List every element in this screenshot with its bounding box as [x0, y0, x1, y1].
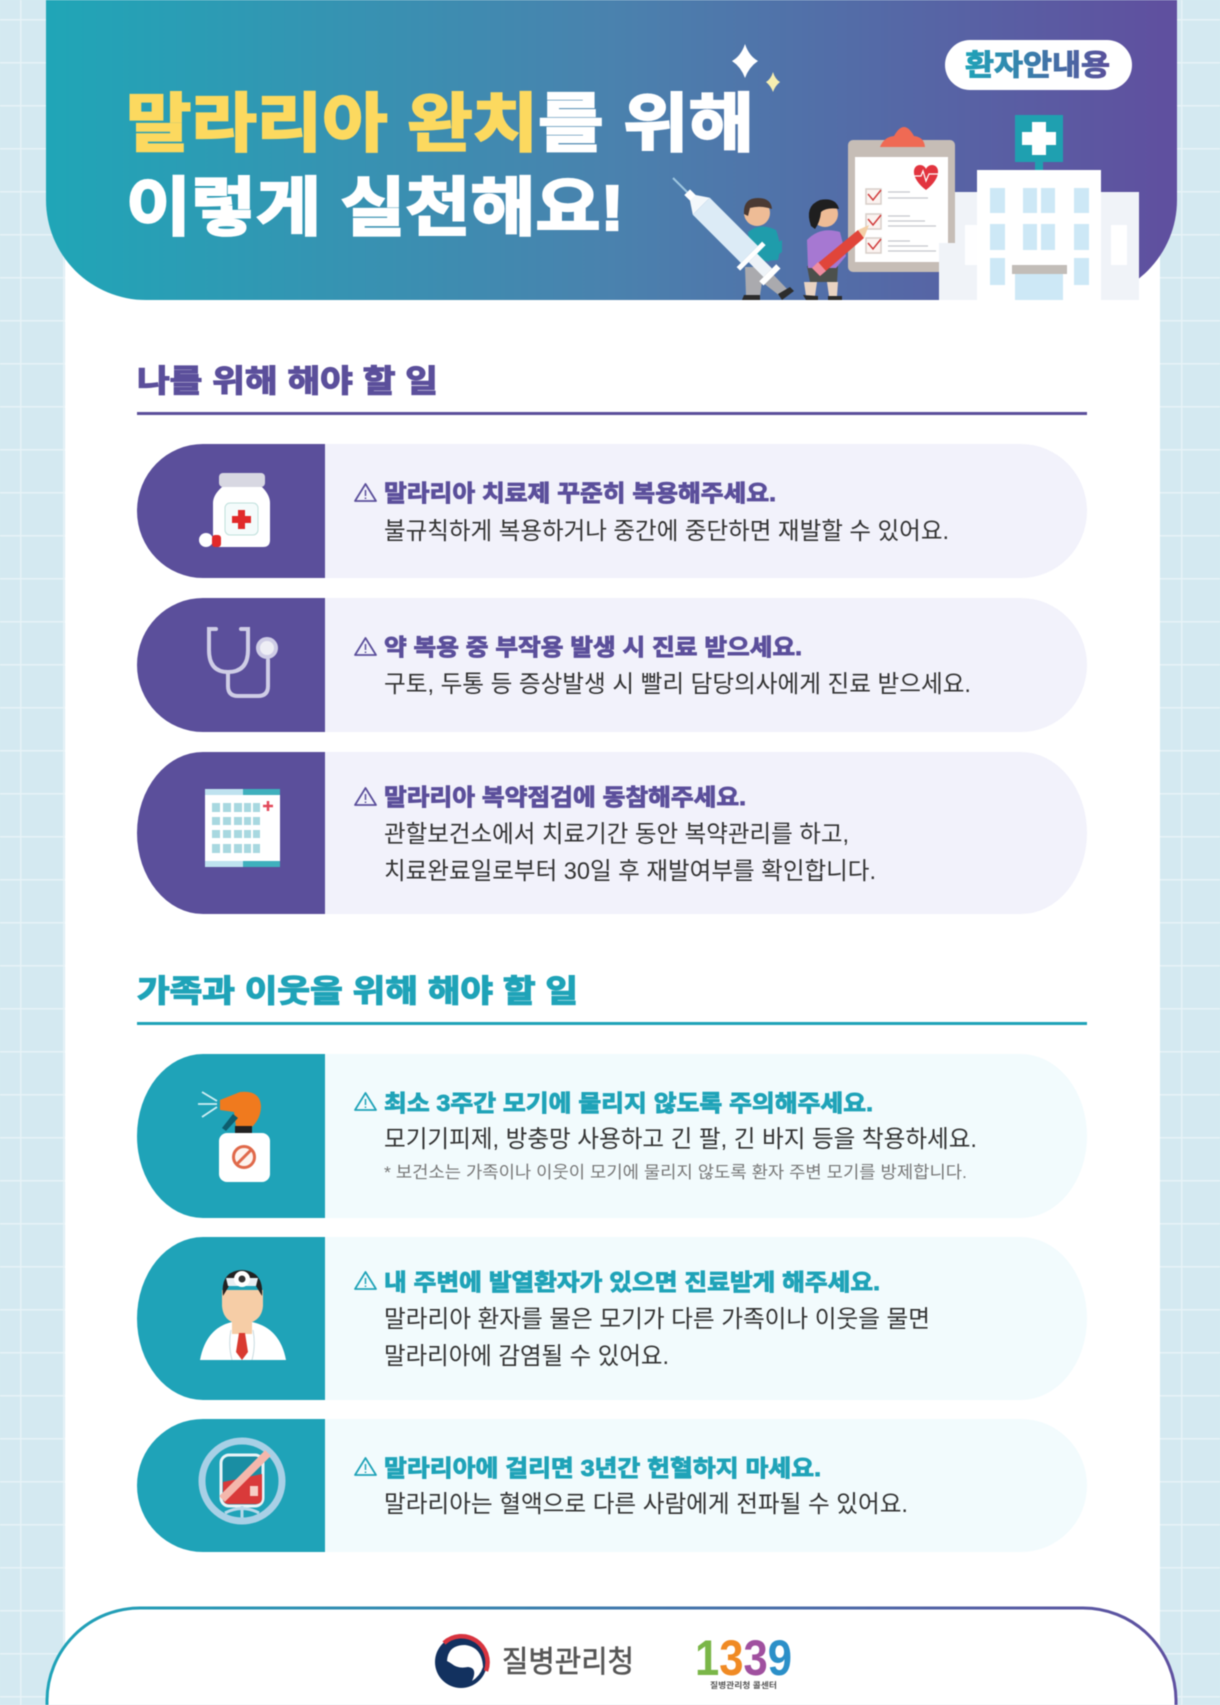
text block: 구토, 두통 등 증상발생 시 빨리 담당의사에게 진료 받으세요. — [384, 671, 971, 698]
text block: 내 주변에 발열환자가 있으면 진료받게 해주세요. — [384, 1269, 880, 1295]
panel: side effects — [137, 598, 1087, 732]
text block: 말라리아 치료제 꾸준히 복용해주세요. — [384, 480, 776, 506]
logo: KDCA emblem — [435, 1636, 488, 1688]
text block — [384, 480, 949, 545]
badge: patient guide — [945, 40, 1132, 90]
icon: pill bottle — [199, 473, 270, 547]
row background — [325, 598, 1087, 732]
illustration: hospital — [939, 115, 1139, 300]
icon panel — [137, 752, 325, 914]
row background — [325, 1237, 1087, 1400]
text block — [384, 1269, 930, 1370]
panel: take medicine — [137, 444, 1087, 578]
text block: 치료완료일로부터 30일 후 재발여부를 확인합니다. — [384, 858, 876, 885]
text block: 말라리아는 혈액으로 다른 사람에게 전파될 수 있어요. — [384, 1491, 908, 1518]
title: 이렇게 실천해요! — [126, 172, 624, 244]
row background — [325, 1054, 1087, 1218]
header gradient background — [46, 0, 1177, 300]
panel: adherence check — [137, 752, 1087, 914]
section heading: for family and neighbors — [137, 974, 1087, 1025]
icon panel — [137, 1419, 325, 1552]
icon: warning — [355, 484, 376, 501]
logo text: 질병관리청 — [502, 1646, 634, 1679]
section heading: for family and neighbors: 가족과 이웃을 위해 해야 할 일 — [137, 974, 578, 1009]
text block — [384, 634, 971, 698]
text block — [384, 784, 876, 885]
icon: warning — [355, 638, 376, 655]
icon: warning — [355, 1458, 376, 1475]
illustration: syringe and man — [660, 165, 794, 300]
text block: 말라리아 복약점검에 동참해주세요. — [384, 784, 746, 810]
text block: 최소 3주간 모기에 물리지 않도록 주의해주세요. — [384, 1090, 873, 1116]
text block: 약 복용 중 부작용 발생 시 진료 받으세요. — [384, 634, 802, 660]
text block: 말라리아에 걸리면 3년간 헌혈하지 마세요. — [384, 1455, 821, 1481]
title: 말라리아 완치 를 위해 — [126, 88, 754, 160]
icon panel — [137, 1237, 325, 1400]
icon: stethoscope — [209, 629, 276, 696]
logo: 1339 call center: 1339 — [695, 1630, 792, 1686]
icon: doctor — [200, 1270, 286, 1360]
footer — [47, 1608, 1176, 1705]
header banner — [46, 0, 1177, 300]
icon: warning — [355, 1093, 376, 1110]
icon: heart — [914, 165, 938, 190]
text block: 말라리아 환자를 물은 모기가 다른 가족이나 이웃을 물면 — [384, 1306, 930, 1333]
icon panel — [137, 1054, 325, 1218]
section heading: for myself: 나를 위해 해야 할 일 — [137, 364, 438, 399]
icon: repellent spray — [198, 1092, 270, 1182]
icon panel — [137, 598, 325, 732]
panel: fever patient nearby — [137, 1237, 1087, 1400]
text block — [384, 1090, 977, 1182]
row background — [325, 752, 1087, 914]
row background — [325, 1419, 1087, 1552]
icon: warning — [355, 788, 376, 805]
text block: 말라리아에 감염될 수 있어요. — [384, 1343, 669, 1370]
illustration: clipboard checklist — [848, 127, 955, 272]
section heading: for myself — [137, 364, 1087, 415]
icon panel — [137, 444, 325, 578]
icon: sparkles — [732, 44, 780, 92]
panel: no blood donation — [137, 1419, 1087, 1552]
title — [126, 88, 754, 244]
icon: calendar — [205, 789, 280, 867]
text block: 관할보건소에서 치료기간 동안 복약관리를 하고, — [384, 821, 849, 848]
row background — [325, 444, 1087, 578]
logo: 1339 call center: 질병관리청 콜센터 — [710, 1680, 777, 1690]
text block: * 보건소는 가족이나 이웃이 모기에 물리지 않도록 환자 주변 모기를 방제합니다. — [384, 1163, 967, 1182]
panel: avoid mosquito bites — [137, 1054, 1087, 1218]
badge: patient guide: 환자안내용 — [965, 49, 1110, 82]
footer outline — [47, 1608, 1176, 1705]
text block: 불규칙하게 복용하거나 중간에 중단하면 재발할 수 있어요. — [384, 518, 949, 545]
checklist items — [866, 189, 936, 253]
icon: warning — [355, 1272, 376, 1289]
text block: 모기기피제, 방충망 사용하고 긴 팔, 긴 바지 등을 착용하세요. — [384, 1126, 977, 1153]
text block — [384, 1455, 908, 1518]
icon: blood bag prohibited — [202, 1441, 282, 1522]
illustration: woman with pencil — [803, 199, 869, 300]
